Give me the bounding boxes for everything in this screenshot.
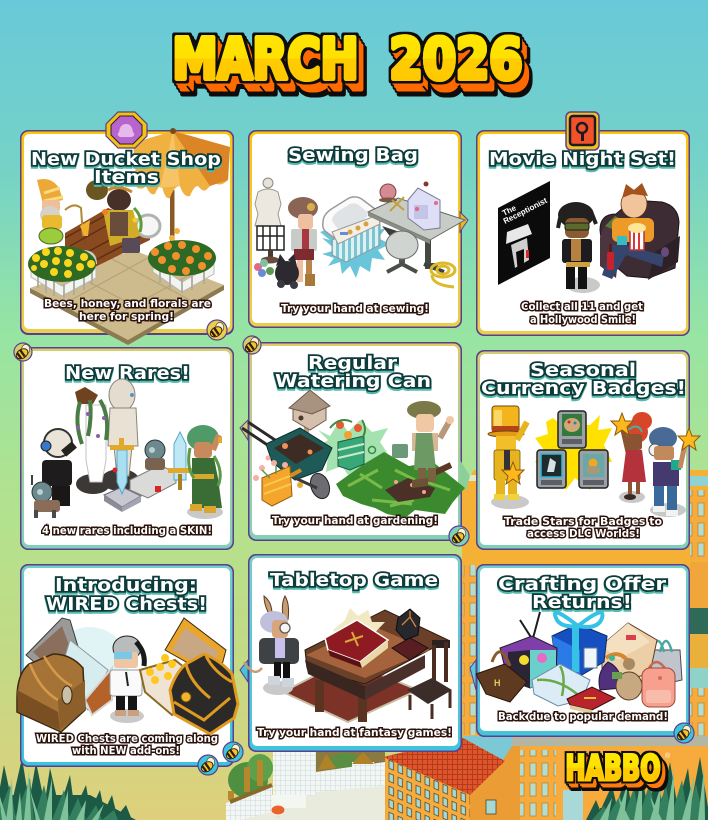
wooden chest <box>17 654 85 732</box>
scissors <box>390 197 404 211</box>
seamstress avatar <box>288 197 318 286</box>
caption: Collect all 11 and get <box>521 301 643 313</box>
panel frame <box>20 112 234 335</box>
grass right <box>586 757 708 820</box>
panel frame <box>240 342 470 541</box>
courtyard floor <box>240 786 385 820</box>
rear bush <box>329 753 361 771</box>
icon: bee 1 <box>207 320 227 340</box>
crystal sword on pedestal <box>104 438 141 512</box>
horned avatar <box>244 596 299 695</box>
honey <box>80 220 90 236</box>
rug <box>283 660 418 722</box>
birdhouse <box>289 390 330 445</box>
tan parcel <box>602 623 657 682</box>
garden patch <box>336 452 465 518</box>
caption: Try your hand at sewing! <box>281 303 429 315</box>
blue burst <box>320 225 390 278</box>
movie poster: The <box>501 203 518 218</box>
dice <box>396 609 420 640</box>
green striped can <box>330 420 376 470</box>
panel: crafting offer returns <box>470 564 690 737</box>
purple pouch <box>599 655 622 690</box>
title <box>172 28 522 96</box>
red book <box>325 620 388 668</box>
paved floor <box>30 250 224 345</box>
panel: new rares <box>20 347 234 550</box>
caption: Try your hand at fantasy games! <box>257 727 452 739</box>
black cat <box>275 254 299 289</box>
popcorn avatar <box>602 183 669 279</box>
caption: with NEW add-ons! <box>72 745 180 757</box>
panel frame <box>240 554 462 752</box>
silver open chest <box>26 618 112 715</box>
sewing bag <box>323 197 380 262</box>
icon: bee 6 <box>223 742 243 762</box>
caption: WIRED Chests are coming along <box>36 733 218 745</box>
logo: habbo: ® <box>665 752 671 760</box>
building: blue cornice <box>463 736 512 762</box>
small robot pet <box>31 475 60 518</box>
great sword <box>168 432 192 490</box>
red book <box>567 687 615 714</box>
green bushes <box>228 754 273 798</box>
building: window rows <box>518 750 556 820</box>
stool <box>386 231 418 272</box>
red haired avatar <box>619 412 652 503</box>
star: gold man <box>502 462 524 484</box>
building: right wall <box>470 746 520 820</box>
badge: paint palette <box>558 411 586 448</box>
panel: wired chests <box>17 564 238 767</box>
heading: Movie Night Set! <box>489 149 676 170</box>
icon: bee 5 <box>198 755 218 775</box>
sewing machine <box>408 182 440 230</box>
badge: film <box>566 112 599 150</box>
badge: ducket shop <box>106 112 147 148</box>
panel frame <box>248 130 468 328</box>
building: stone cornice <box>512 736 708 746</box>
floral woman <box>86 180 141 253</box>
left fence <box>226 760 272 820</box>
white wall right <box>316 762 385 798</box>
icon: bee 7 <box>674 723 694 743</box>
panel frame <box>470 564 690 737</box>
tall pale mannequin <box>101 379 139 491</box>
nature avatar <box>187 425 223 519</box>
icy parcel <box>532 664 590 706</box>
burst <box>333 608 385 642</box>
badge: duck <box>579 450 608 488</box>
title: MARCH <box>172 28 358 92</box>
panel: movie night set <box>476 112 690 336</box>
gold open chest <box>140 618 226 715</box>
caption <box>521 301 643 326</box>
heading <box>498 574 666 613</box>
blue gift <box>552 613 607 676</box>
heading <box>275 353 431 392</box>
dress form <box>255 178 284 264</box>
chair <box>407 640 452 719</box>
sewing table <box>368 198 465 272</box>
table <box>305 610 448 722</box>
heading: Introducing: <box>55 575 197 596</box>
tower base <box>270 795 306 808</box>
building: rear yellow facade <box>462 470 708 760</box>
caption: 4 new rares including a SKIN! <box>42 525 212 537</box>
rear garden wall <box>316 752 385 782</box>
panel: new ducket shop items <box>20 112 234 345</box>
robot on stand <box>130 440 176 498</box>
gray shopping bag <box>645 641 682 685</box>
side windows on right wall <box>486 800 496 814</box>
bench <box>65 208 160 267</box>
title: 2026 <box>390 28 522 92</box>
heading <box>481 360 686 399</box>
white pillars right <box>318 752 374 792</box>
pink backpack <box>642 662 675 707</box>
measuring tape <box>431 263 455 287</box>
panel frame <box>20 564 234 767</box>
panel frame <box>476 350 690 550</box>
heading: WIRED Chests! <box>46 594 207 615</box>
parasol <box>133 128 230 248</box>
panel: tabletop game <box>240 554 462 752</box>
caption: Bees, honey, and florals are <box>44 298 211 310</box>
retro tv <box>500 612 557 688</box>
panel: regular watering can <box>240 342 470 541</box>
icon: bee 4 <box>449 526 469 546</box>
heading: New Ducket Shop <box>31 149 221 170</box>
red roof <box>383 738 505 795</box>
heading: Tabletop Game <box>270 570 438 591</box>
caption <box>36 733 218 757</box>
heading: New Rares! <box>65 363 190 384</box>
caption <box>504 516 662 540</box>
caption: here for spring! <box>79 311 174 323</box>
heading <box>31 149 221 188</box>
leather handbag <box>476 652 527 702</box>
star: cap avatar <box>678 428 700 450</box>
panel frame <box>476 130 690 336</box>
panel: seasonal currency badges <box>476 350 700 550</box>
building: orange tower with windows <box>512 746 708 820</box>
caption: Try your hand at gardening! <box>272 515 438 527</box>
leather handbag: H <box>494 678 500 688</box>
caption: access DLC Worlds! <box>527 528 640 540</box>
heading: Sewing Bag <box>288 145 418 166</box>
heading: Seasonal <box>530 360 636 381</box>
white tower <box>273 752 316 796</box>
glow <box>52 627 128 703</box>
vine covered mannequin <box>75 387 110 494</box>
logo: habbo: HABBO <box>566 749 660 789</box>
pin cushion <box>379 184 397 202</box>
caption: Back due to popular demand! <box>498 711 668 723</box>
sunglasses avatar <box>558 202 600 293</box>
yellow flowers planter <box>28 246 96 298</box>
heading: Regular <box>308 353 397 374</box>
mushroom table <box>271 805 285 818</box>
star: red haired avatar <box>611 413 633 435</box>
caption: Trade Stars for Badges to <box>504 516 662 528</box>
headphones figure <box>41 429 77 506</box>
small leather book <box>392 638 428 660</box>
burlap sack <box>612 658 642 700</box>
icon: bee 3 <box>243 336 261 354</box>
cap avatar <box>649 427 686 517</box>
gardener avatar <box>392 401 454 488</box>
gold burst <box>535 415 612 490</box>
black chest <box>170 654 238 734</box>
orange flowers planter <box>148 228 216 293</box>
orange watering can <box>253 456 303 506</box>
heading: Items <box>94 167 159 188</box>
icon: bee 2 <box>14 343 32 361</box>
heading: Currency Badges! <box>481 378 686 399</box>
gold suited avatar <box>488 406 529 509</box>
green burst <box>316 420 388 478</box>
gnome <box>37 179 83 244</box>
soda bottle <box>607 244 614 270</box>
buttons <box>254 259 274 277</box>
panel frame <box>20 347 234 550</box>
caption <box>44 298 211 323</box>
goggles avatar <box>110 636 144 723</box>
grass left <box>0 758 136 820</box>
building: wall below roof <box>383 757 470 820</box>
heading <box>46 575 207 615</box>
caption: a Hollywood Smile! <box>530 314 636 326</box>
heading: Watering Can <box>275 371 431 392</box>
heading: Returns! <box>532 592 632 613</box>
building: side windows <box>563 790 583 820</box>
wheelbarrow <box>242 422 333 501</box>
background city <box>0 470 708 820</box>
armchair <box>600 200 680 280</box>
movie poster <box>498 181 550 285</box>
badge: statue <box>537 450 566 488</box>
movie poster: Receptionist <box>502 196 549 226</box>
panel: sewing bag <box>248 130 468 328</box>
heading: Crafting Offer <box>498 574 666 595</box>
